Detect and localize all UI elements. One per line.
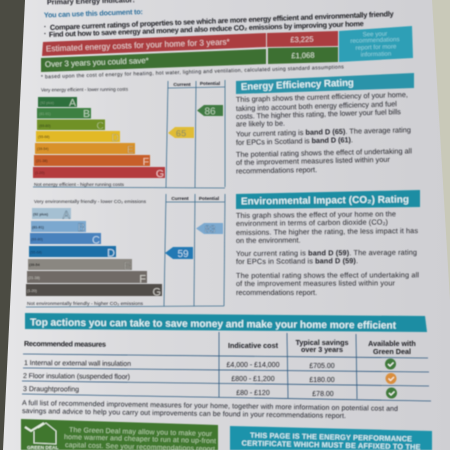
environmental impact rating panel: Environmental Impact (CO₂) Rating: [241, 194, 409, 207]
panel text: environment in terms of carbon dioxide (CO₂): [236, 217, 388, 228]
band F: [27, 271, 147, 286]
top caption: Very energy efficient - lower running costs: [41, 87, 129, 93]
table header: Indicative cost: [228, 341, 279, 350]
potential rating arrow 83: 83: [204, 224, 216, 236]
costs table: See your: [362, 31, 387, 38]
band F: F: [143, 156, 149, 168]
band C: C: [96, 120, 104, 132]
top actions heading bar: [25, 313, 427, 332]
icon: orange tick: [386, 373, 396, 384]
dark surface at left: [0, 0, 25, 450]
band F: [34, 155, 150, 168]
costs table: information: [361, 50, 392, 59]
panel text: are likely to be.: [236, 119, 285, 128]
row 3: £80 - £120: [236, 390, 270, 397]
full list note: savings and advice to help you carry out improvements can be found in your recommendations report.: [22, 408, 346, 420]
band B: (81-91): [39, 112, 51, 116]
intro bullets: Compare current ratings of properties to see which are more energy efficient and environmentally friendly: [50, 9, 395, 32]
band D: [36, 131, 120, 144]
potential rating arrow 83: [196, 223, 223, 236]
band C: (69-80): [31, 238, 43, 242]
panel text: This graph shows the effect of your home on the: [236, 209, 396, 220]
full list note: A full list of recommended improvement measures for your home, together with more information on potential cost and: [22, 400, 398, 413]
row 1: 1 Internal or external wall insulation: [24, 360, 131, 368]
measures table: [22, 332, 431, 401]
band A: (92 plus): [33, 212, 49, 216]
panel text: emissions. The higher the rating, the less impact it has: [236, 226, 418, 237]
band D: [29, 246, 116, 260]
panel heading: [236, 73, 414, 94]
green deal text: [64, 427, 216, 450]
current rating arrow 65: [168, 127, 194, 140]
full list note: [22, 400, 398, 420]
row 2: 2 Floor insulation (suspended floor): [23, 373, 130, 381]
band C: C: [92, 234, 100, 246]
band E: [28, 259, 132, 272]
panel text: taking into account both energy efficiency and fuel: [236, 99, 397, 113]
table header: over 3 years: [301, 345, 343, 354]
table header: Typical savings: [296, 338, 348, 347]
band E: (39-54: [29, 263, 41, 267]
panel text: costs. The higher this rating, the lower your fuel bills: [236, 107, 401, 121]
band G: [26, 284, 162, 298]
see recommendations box: [339, 26, 413, 62]
row 3: [23, 386, 334, 398]
environmental impact chart: [26, 194, 225, 307]
savings row: [41, 49, 266, 72]
column headers: Current: [171, 196, 189, 202]
panel text: [236, 90, 412, 175]
table header: Green Deal: [373, 347, 411, 356]
costs table: £1,068: [291, 51, 315, 60]
costs table: Over 3 years you could save*: [45, 56, 149, 69]
footnote: * based upon the cost of energy for heating, hot water, lighting and ventilation, calculated using standard assumptions: [41, 64, 344, 80]
band C: [37, 120, 105, 132]
icon: green deal house and tick: [25, 423, 59, 450]
band F: F: [139, 274, 146, 286]
current rating arrow 59: 59: [177, 249, 189, 260]
table header: [24, 338, 416, 356]
band F: (21-38): [36, 159, 48, 163]
panel text: for EPCs in Scotland is band D (59).: [236, 256, 358, 266]
costs table: recommendations: [350, 36, 400, 45]
band A: [32, 208, 71, 222]
band B: (81-91): [32, 226, 45, 230]
band G: (1-20): [35, 171, 45, 175]
row 3: £78.00: [312, 391, 334, 398]
costs table: [41, 26, 413, 72]
current rating arrow 59: [165, 247, 193, 260]
band D: D: [111, 132, 119, 144]
band C: (69-80): [39, 124, 51, 128]
top actions heading bar: Top actions you can take to save money and make your home more efficient: [30, 318, 397, 332]
green deal text: The Green Deal may allow you to make your: [69, 427, 213, 438]
costs table: report for more: [355, 43, 397, 52]
panel heading: [236, 190, 420, 209]
panel text: This graph shows the current efficiency of your home,: [236, 90, 408, 104]
row 2: £180.00: [309, 377, 335, 384]
panel text: of the improvement measures listed within your: [236, 278, 396, 288]
icon: green tick: [385, 358, 396, 370]
intro bullets: ·: [44, 22, 47, 31]
band B: B: [83, 108, 90, 120]
certificate notice box: THIS PAGE IS THE ENERGY PERFORMANCE: [250, 431, 412, 443]
bottom caption: Not energy efficient - higher running costs: [34, 182, 125, 188]
panel text: of the improvement measures listed within your: [236, 155, 391, 167]
table rules: [22, 332, 431, 401]
band G: [33, 167, 165, 180]
intro bullets: ·: [44, 29, 47, 38]
intro heading: You can use this document to:: [44, 7, 143, 19]
column headers: Current: [173, 82, 191, 88]
potential rating arrow 86: 86: [204, 106, 216, 118]
band G: (1-20): [27, 289, 37, 293]
intro bullets: Find out how to save energy and money and also reduce CO₂ emissions by improving your home: [49, 19, 364, 39]
panel text: recommendations report.: [236, 288, 317, 297]
row 2: [23, 373, 335, 384]
band D: D: [107, 248, 115, 260]
band E: [35, 143, 135, 156]
row 3: 3 Draughtproofing: [23, 386, 79, 393]
band G: G: [152, 286, 161, 298]
row 1: [24, 360, 335, 370]
band A: A: [69, 97, 76, 109]
row 1: £4,000 - £14,000: [227, 362, 280, 369]
panel text: The potential rating shows the effect of undertaking all: [236, 270, 419, 280]
energy efficiency rating panel: [236, 73, 414, 175]
panel text: on the environment.: [236, 236, 301, 245]
band A: (92 plus): [40, 101, 54, 105]
costs table: Estimated energy costs for your home for 3 years*: [46, 37, 231, 53]
energy efficiency chart: [33, 80, 225, 188]
band D: (55-68): [38, 135, 50, 139]
panel text: Your current rating is band D (65). The average rating: [236, 125, 411, 138]
band B: [31, 221, 86, 234]
green deal text: home warmer and cheaper to run at no up-front: [64, 434, 216, 445]
light surface at right: [432, 0, 450, 300]
chart frame: [26, 194, 225, 307]
band A: [38, 97, 77, 109]
chart frame: [33, 80, 225, 188]
band C: [30, 233, 101, 246]
table header: Recommended measures: [24, 339, 106, 349]
row 2: £800 - £1,200: [231, 376, 275, 383]
band E: E: [124, 260, 131, 272]
band E: E: [127, 144, 134, 156]
energy efficiency chart: Potential: [200, 81, 220, 87]
top caption: Very environmentally friendly - lower CO₂ emissions: [34, 199, 147, 205]
potential rating arrow 86: [197, 105, 223, 118]
band B: B: [78, 222, 85, 234]
icon: green tick: [386, 388, 397, 398]
panel text: recommendations report.: [236, 165, 317, 175]
band D: (55-68): [30, 250, 42, 254]
band F: (21-38): [28, 276, 40, 280]
environmental impact rating panel: [236, 190, 420, 297]
band B: [37, 108, 91, 120]
panel text: Your current rating is band D (59). The average rating: [236, 248, 417, 258]
intro block: [44, 7, 395, 39]
band E: (39-54): [37, 147, 49, 151]
table header: Available with: [368, 339, 416, 348]
band G: G: [156, 168, 164, 180]
panel text: [236, 209, 419, 297]
band A: A: [63, 210, 71, 222]
costs table: £3,225: [290, 35, 314, 44]
bottom caption: Not environmentally friendly - higher CO₂ emissions: [27, 301, 144, 307]
certificate notice box: [230, 426, 432, 450]
panel text: The potential rating shows the effect of undertaking all: [236, 146, 412, 159]
energy efficiency rating panel: Energy Efficiency Rating: [241, 78, 354, 93]
row 1: £705.00: [309, 363, 335, 370]
estimated costs row: [42, 33, 266, 56]
panel text: for EPCs in Scotland is band D (61).: [236, 135, 353, 147]
green deal box: [21, 419, 218, 450]
environmental impact chart: Potential: [199, 196, 219, 202]
current rating arrow 65: 65: [176, 128, 187, 140]
